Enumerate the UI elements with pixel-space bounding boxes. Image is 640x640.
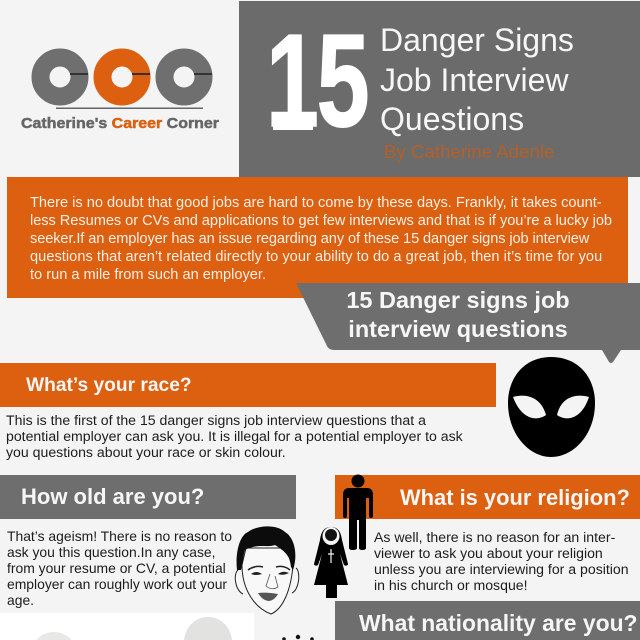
icon: logo rings bbox=[40, 58, 212, 109]
text: age: ask you this question.In any case, bbox=[7, 544, 215, 560]
title text: Job Interview bbox=[380, 62, 569, 98]
text: age: from your resume or CV, a potential bbox=[7, 560, 226, 576]
icon: alien head bbox=[508, 357, 595, 457]
title text bbox=[380, 22, 574, 137]
heading: How old are you? bbox=[21, 484, 204, 509]
image panel: eggs bbox=[0, 613, 254, 640]
text: age bbox=[7, 528, 232, 608]
logo text: Catherine's Career Corner bbox=[21, 115, 219, 132]
intro text: questions that aren’t related directly to your ability to do a great job, then it’s time for you bbox=[30, 249, 602, 265]
byline: By Catherine Adenle bbox=[384, 141, 554, 162]
text: age: That’s ageism! There is no reason to bbox=[7, 528, 232, 544]
intro panel bbox=[7, 177, 628, 298]
section bar: nationality bbox=[335, 601, 640, 640]
heading: What nationality are you? bbox=[359, 610, 638, 636]
heading text: 15 Danger signs job bbox=[346, 287, 570, 313]
intro text bbox=[30, 195, 612, 283]
text: religion: As well, there is no reason for an inter- bbox=[374, 529, 615, 545]
heading text bbox=[346, 287, 570, 342]
intro text: less Resumes or CVs and applications to get few interviews and that is if you’re a lucky job bbox=[30, 213, 612, 229]
text: race: potential employer can ask you. It is illegal for a potential employer to ask bbox=[6, 428, 463, 444]
egg left bbox=[32, 632, 76, 640]
heading: What’s your race? bbox=[26, 375, 192, 396]
text: age: employer can roughly work out your bbox=[7, 576, 227, 592]
heading text: interview questions bbox=[348, 316, 568, 342]
text: religion: viewer to ask you about your religion bbox=[374, 545, 603, 561]
icon: people dots bbox=[282, 634, 314, 640]
text: religion bbox=[374, 529, 629, 593]
intro text: seeker.If an employer has an issue regarding any of these 15 danger signs job interview bbox=[30, 231, 589, 247]
big number 15: 15 bbox=[266, 7, 367, 154]
title text: Danger Signs bbox=[380, 22, 574, 58]
title panel bbox=[239, 1, 640, 177]
icon: man bbox=[343, 474, 373, 550]
logo bbox=[21, 48, 219, 132]
intro text: to run a mile from such an employer. bbox=[30, 267, 266, 283]
text: religion: unless you are interviewing for a position bbox=[374, 561, 629, 577]
heading: What is your religion? bbox=[400, 485, 630, 510]
egg right bbox=[184, 617, 232, 640]
icon: man face bbox=[234, 526, 300, 614]
text: race: This is the first of the 15 danger signs job interview questions that a bbox=[6, 412, 426, 428]
section bar: race bbox=[0, 363, 496, 407]
title text: Questions bbox=[380, 101, 524, 137]
section bar: religion bbox=[335, 475, 640, 519]
speech bubble heading bbox=[296, 283, 640, 363]
text: race: you questions about your race or skin colour. bbox=[6, 444, 286, 460]
intro text: There is no doubt that good jobs are hard to come by these days. Frankly, it takes count- bbox=[30, 195, 602, 211]
section bar: age bbox=[0, 475, 296, 519]
text: race bbox=[6, 412, 463, 460]
icon: nun bbox=[314, 527, 348, 598]
text: religion: in his church or mosque! bbox=[374, 577, 528, 593]
text: age: age. bbox=[7, 592, 34, 608]
